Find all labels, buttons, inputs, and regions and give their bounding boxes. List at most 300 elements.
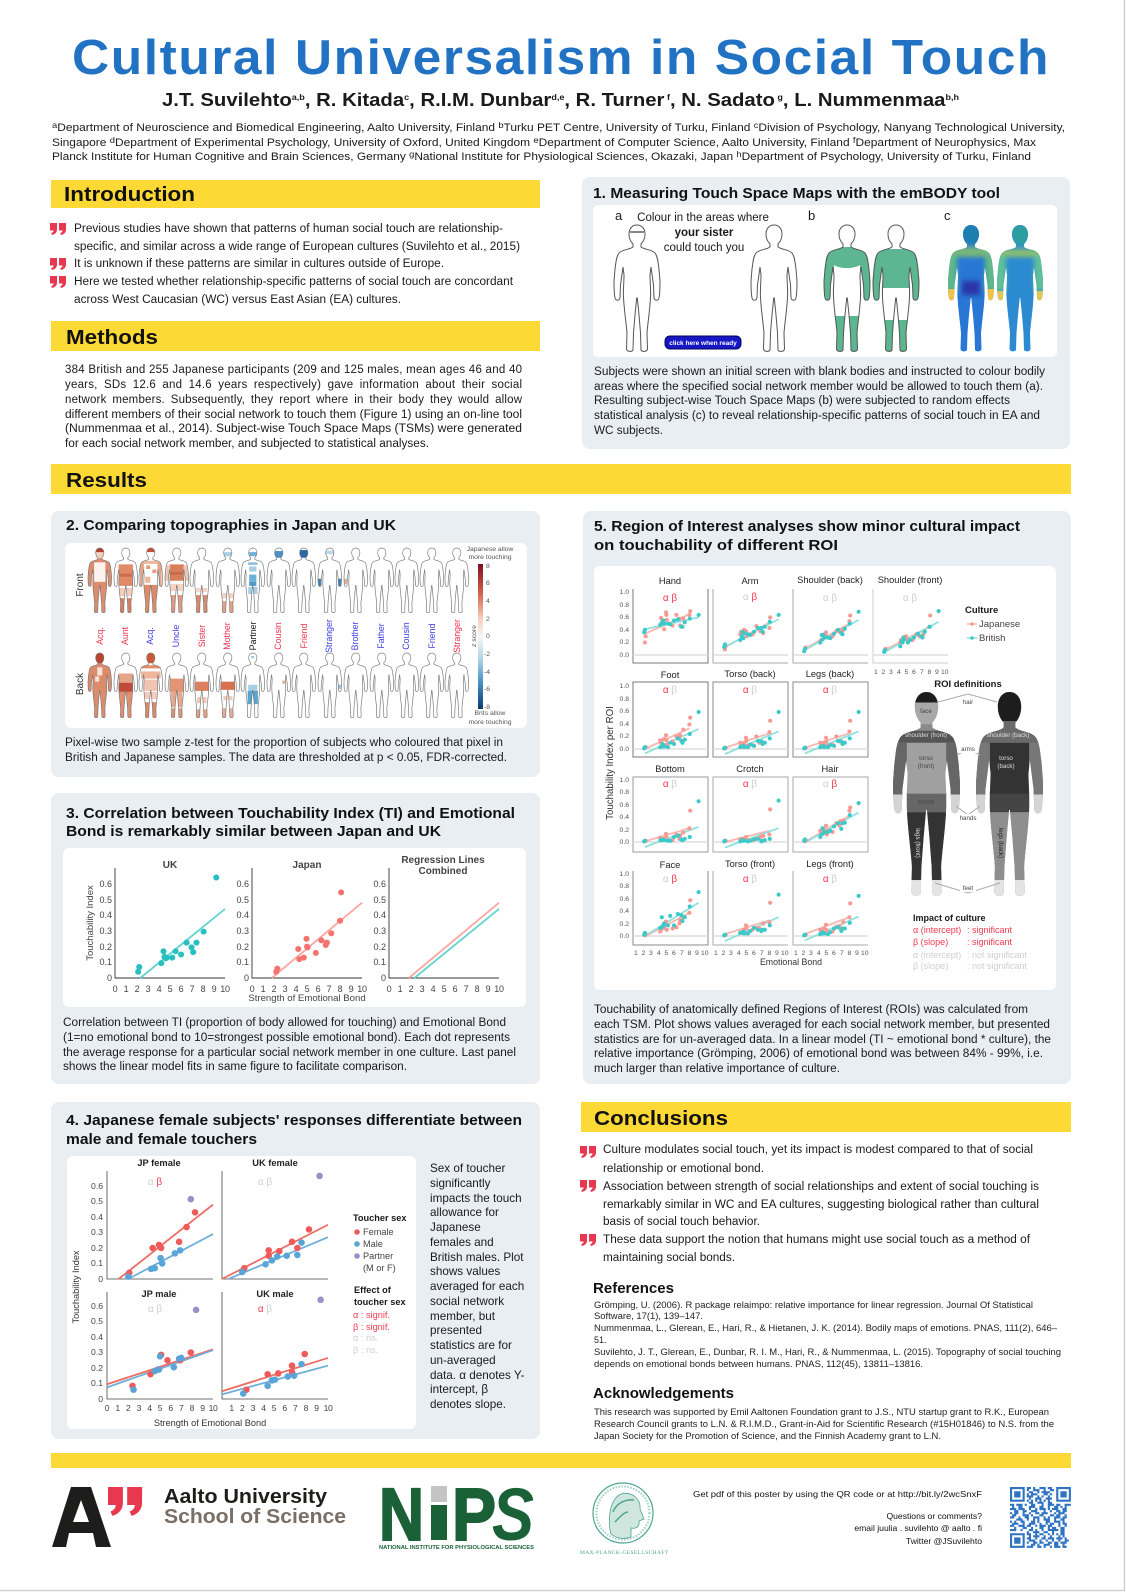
chart: regression lines combined: Combined: [419, 866, 467, 877]
legend: toucher sex: Male: [363, 1239, 383, 1249]
chart: UK: Touchability Index: [85, 885, 96, 961]
heading: Conclusions: Conclusions: [594, 1107, 728, 1130]
chart: UK male: 12345678910: [229, 1403, 333, 1413]
row labels: [75, 573, 86, 695]
y axis tick labels: 0.4: [620, 814, 629, 821]
rotated relationship labels: Father: [376, 623, 386, 649]
plot: Shoulder (front): [873, 575, 948, 663]
acknowledgements: This research was supported by Emil Aaltonen Foundation grant to J.S., NTU startup grant to R.K., European: [594, 1407, 1049, 1417]
side text: intercept, β: [430, 1383, 488, 1396]
body maps: back row: [88, 653, 469, 718]
plot: Hand: α β: [663, 593, 677, 604]
contact text: Get pdf of this poster by using the QR code or at http://bit.ly/2wcSnxF: [693, 1489, 982, 1499]
acknowledgements: [593, 1385, 1054, 1441]
chart: Japan: 0: [244, 973, 249, 983]
y axis tick labels: 0.2: [620, 921, 629, 928]
plot: Shoulder (front): Shoulder (front): [878, 575, 942, 585]
chart: JP female: 0.4: [91, 1212, 103, 1222]
plot: Legs (back): α β: [823, 685, 837, 696]
introduction bullets: across West Caucasian (WC) versus East Asian (EA) cultures.: [74, 294, 401, 306]
chart: JP male: 0.1: [91, 1378, 103, 1388]
caption: Subjects were shown an initial screen with blank bodies and instructed to colour bodily: [594, 366, 1045, 378]
authors: d,e: [551, 93, 565, 102]
side text: significantly: [430, 1177, 491, 1190]
figure a: blank bodies with prompt: could touch you: [664, 242, 744, 254]
chart: UK: 0.5: [99, 895, 112, 905]
panel 4: Japanese female subjects' responses: male and female touchers: [66, 1131, 257, 1148]
conclusions bullets: maintaining social bonds.: [603, 1252, 735, 1264]
rotated relationship labels: Cousin: [401, 622, 411, 650]
affiliations: Department of Neurophysics, Max: [856, 137, 1037, 149]
rotated relationship labels: Partner: [248, 622, 258, 650]
panel 3: correlation between touchability and bond: Bond is remarkably similar between Japan and UK: [66, 823, 441, 840]
plot: Legs (front): Legs (front): [806, 859, 854, 869]
colour bar: more touching: [468, 554, 512, 561]
chart: JP female: 0.6: [91, 1181, 103, 1191]
authors: f: [664, 93, 670, 102]
caption: each TSM. Plot shows values averaged for each social network member, but presented: [594, 1019, 1050, 1031]
logo: Max Planck Society: [580, 1483, 669, 1556]
conclusions bullets: Association between strength of social relationships and extent of social touching is: [603, 1181, 1039, 1193]
plot: Legs (front): α β: [823, 874, 837, 885]
panel 1: measuring touch space maps: [582, 177, 1070, 449]
plot: Torso (front): [713, 859, 788, 945]
side text: presented: [430, 1324, 482, 1337]
legend: impact of culture: β (slope): [913, 961, 948, 971]
affiliations: f: [853, 135, 856, 145]
authors: c: [404, 93, 410, 102]
axis labels: Touchability Index: [71, 1250, 81, 1324]
side text: member, but: [430, 1310, 496, 1323]
side text: data. α denotes Y-: [430, 1369, 525, 1382]
affiliations: g: [409, 149, 415, 159]
side text: denotes slope.: [430, 1398, 506, 1411]
chart: regression lines combined: 0.3: [373, 926, 386, 936]
ROI labels: face: [920, 708, 932, 715]
legend: toucher sex: β : ns.: [353, 1345, 378, 1355]
colour bar: -4: [484, 669, 490, 676]
chart: JP female: 0.3: [91, 1227, 103, 1237]
heading: Results: Results: [66, 469, 147, 492]
authors: , L. Nummenmaa: [783, 90, 947, 110]
ROI labels: hands: [960, 815, 976, 822]
y axis tick labels: 0.8: [620, 789, 629, 796]
legend: toucher sex: [353, 1213, 407, 1355]
ROI labels: torso: [999, 755, 1013, 762]
plot: Bottom: [633, 764, 708, 852]
chart: regression lines combined: 0.6: [373, 879, 386, 889]
colour bar: 2: [486, 616, 490, 623]
plot: Face: [633, 860, 708, 945]
y axis tick labels: 0.4: [620, 908, 629, 915]
panel 5: region of interest analyses: [583, 511, 1071, 1084]
side text: British males. Plot: [430, 1251, 524, 1264]
colour bar: 4: [486, 598, 490, 605]
caption: shows the linear model fits in same figure to facilitate comparison.: [63, 1061, 407, 1073]
chart: JP male: 012345678910: [105, 1403, 218, 1413]
legend: impact of culture: : significant: [967, 925, 1013, 935]
caption: [594, 366, 1045, 437]
chart: UK male: α β: [258, 1304, 272, 1315]
y axis tick labels: 0.6: [620, 802, 629, 809]
ROI labels: legs (front): [914, 828, 921, 858]
y axis tick labels: 0.6: [620, 896, 629, 903]
introduction bullets: [50, 223, 520, 306]
authors: J.T. Suvilehto: [162, 90, 277, 110]
references: Suvilehto, J. T., Glerean, E., Dunbar, R. I. M., Hari, R., & Nummenmaa, L. (2015). Topography of social touching: [594, 1347, 1061, 1357]
references: Software, 17(1), 139–147.: [594, 1311, 703, 1321]
plot: Foot: α β: [663, 685, 677, 696]
side text: Sex of toucher: [430, 1162, 505, 1175]
affiliations: Department of Experimental Psychology, University of Oxford, United Kingdom: [115, 137, 533, 149]
heading: Methods: [51, 321, 540, 351]
logo: Aalto University: Aalto University: [164, 1486, 328, 1508]
axis labels: [605, 706, 822, 967]
plot: Shoulder (front): α β: [903, 593, 917, 604]
chart: regression lines combined: [373, 855, 504, 994]
plot: Hand: Hand: [659, 576, 681, 586]
conclusions bullets: basis of social touch behavior.: [603, 1216, 760, 1228]
rotated relationship labels: Stranger: [324, 619, 334, 653]
colour bar: -6: [484, 686, 490, 693]
conclusions bullets: [580, 1144, 1039, 1264]
x axis tick labels: 12345678910: [874, 669, 949, 676]
figure a: blank bodies with prompt: Colour in the areas where: [637, 212, 769, 224]
affiliations: Department of Neuroscience and Biomedical Engineering, Aalto University, Finland: [57, 122, 498, 134]
y axis tick labels: 0.0: [620, 839, 629, 846]
references: References: [593, 1280, 674, 1297]
references: Nummenmaa, L., Glerean, E., Hari, R., & Hietanen, J. K. (2014). Bodily maps of emotions. PNAS, 111(2), 646–: [594, 1323, 1057, 1333]
chart: JP male: [91, 1289, 218, 1413]
panel 3: correlation between touchability and bond: 3. Correlation between Touchability Index (TI) and Emotional: [66, 805, 515, 822]
ROI labels: (back): [997, 763, 1015, 770]
colour bar: -8: [484, 704, 490, 711]
legend: impact of culture: : not significant: [967, 950, 1028, 960]
chart: UK: 0: [107, 973, 112, 983]
chart: UK: UK: [163, 860, 178, 871]
side text: un-averaged: [430, 1354, 496, 1367]
y axis tick labels: 0.4: [620, 627, 629, 634]
colour bar: Brits allow: [475, 710, 506, 717]
side text: [430, 1162, 525, 1411]
affiliations: Division of Psychology, Nanyang Technological University,: [758, 122, 1065, 134]
plot: Torso (front): Torso (front): [725, 859, 775, 869]
logo: Max Planck Society: MAX-PLANCK-GESELLSCHAFT: [580, 1550, 669, 1556]
logo: NIPS: P: [452, 1473, 496, 1556]
chart: UK: 0.4: [99, 910, 112, 920]
introduction bullets: specific, and similar across a wide range of European cultures (Suvilehto et al., 2015): [74, 241, 520, 253]
figure a: blank bodies with prompt: [614, 208, 797, 351]
chart: UK: [85, 860, 230, 994]
panel 2: comparing topographies: 2. Comparing topographies in Japan and UK: [66, 517, 396, 534]
legend: toucher sex: Female: [363, 1227, 394, 1237]
rotated relationship labels: Cousin: [273, 622, 283, 650]
plot: Shoulder (back): α β: [823, 593, 837, 604]
ROI labels: torso: [919, 755, 933, 762]
plot: Crotch: α β: [743, 779, 757, 790]
chart: JP female: α β: [148, 1177, 162, 1188]
plot: Foot: Foot: [661, 670, 680, 680]
y axis tick labels: 0.8: [620, 602, 629, 609]
chart: UK: 0.1: [99, 957, 112, 967]
legend: culture: British: [979, 633, 1005, 644]
legend: impact of culture: [913, 913, 1028, 971]
side text: allowance for: [430, 1206, 499, 1219]
ROI labels: (front): [918, 763, 934, 770]
chart: regression lines combined: 0: [381, 973, 386, 983]
legend: impact of culture: α (intercept): [913, 950, 961, 960]
rotated relationship labels: Uncle: [171, 625, 181, 647]
heading: Introduction: [51, 180, 540, 208]
panel 2: comparing topographies: [51, 511, 540, 777]
authors: , R. Kitada: [305, 90, 405, 110]
ROI labels: shoulder (back): [987, 732, 1029, 739]
plot: Shoulder (back): Shoulder (back): [797, 575, 863, 585]
figure a: blank bodies with prompt: a: [615, 208, 623, 223]
legend: toucher sex: α : signif.: [353, 1310, 390, 1320]
plot: Arm: α β: [743, 592, 757, 603]
y axis tick labels: 0.2: [620, 827, 629, 834]
chart: UK: 012345678910: [113, 984, 230, 994]
conclusions bullets: These data support the notion that humans might use social touch as a method of: [603, 1234, 1031, 1246]
y axis tick labels: [620, 589, 629, 940]
chart: JP female: 0.2: [91, 1243, 103, 1253]
plot: Bottom: α β: [663, 779, 677, 790]
chart: Japan: 0.5: [236, 895, 249, 905]
heading: Conclusions: [581, 1102, 1071, 1132]
acknowledgements: Japan Society for the Promotion of Science, and the Finnish Academy grant to L.N.: [594, 1431, 941, 1441]
ROI labels: crotch: [918, 799, 935, 806]
chart: Japan: 0.3: [236, 926, 249, 936]
connector lines: [935, 694, 1000, 893]
authors: , R.I.M. Dunbar: [409, 90, 551, 110]
title: Cultural Universalism in Social Touch: [72, 31, 1050, 85]
rotated relationship labels: Brother: [350, 622, 360, 650]
affiliations: c: [754, 120, 759, 130]
ROI labels: legs (back): [997, 828, 1004, 858]
chart: Japan: 0.4: [236, 910, 249, 920]
legend: culture: Culture: [965, 605, 998, 616]
caption: [65, 737, 507, 764]
colour bar: more touching: [468, 719, 512, 726]
axis labels: Emotional Bond: [760, 957, 822, 967]
chart: Japan: 012345678910: [250, 984, 367, 994]
contact text: Twitter @JSuvilehto: [906, 1536, 982, 1546]
row labels: Back: [75, 672, 86, 695]
conclusions bullets: remarkably similar in WC and EA cultures, suggesting biological rather than cultural: [603, 1199, 1039, 1211]
figure c: statistical group map: [943, 208, 1048, 352]
methods text: different members of their social network to touch them (Figure 1) using an on-line tool: [65, 409, 522, 421]
y axis tick labels: 0.8: [620, 883, 629, 890]
logo: NIPS: N: [379, 1473, 424, 1556]
axis labels: [71, 1250, 266, 1428]
caption: (1=no emotional bond to 10=strongest possible emotional bond). Each dot represents: [63, 1032, 510, 1044]
y axis tick labels: 0.2: [620, 733, 629, 740]
plot: Face: α β: [663, 874, 677, 885]
legend: impact of culture: Impact of culture: [913, 913, 986, 923]
chart: UK female: α β: [258, 1177, 272, 1188]
plot: Arm: Arm: [741, 576, 759, 586]
affiliations: Turku PET Centre, University of Turku, Finland: [504, 122, 754, 134]
chart: Japan: [236, 860, 367, 1004]
figure a: blank bodies with prompt: your sister: [675, 227, 734, 239]
body maps: front row: [88, 548, 469, 613]
affiliations: e: [533, 135, 539, 145]
rotated relationship labels: Aunt: [120, 626, 130, 645]
footer bar: [51, 1453, 1071, 1468]
ROI labels: arms: [961, 746, 975, 753]
caption: statistics are for un-averaged data. In a linear model (TI ~ emotional bond * culture), the: [594, 1034, 1051, 1046]
plot: Bottom: Bottom: [655, 764, 685, 774]
affiliations: Singapore: [52, 137, 101, 149]
affiliations: h: [736, 149, 742, 159]
plot: Crotch: [713, 764, 788, 852]
caption: Resulting subject-wise Touch Space Maps (b) were subjected to random effects: [594, 395, 1010, 407]
caption: British and Japanese samples. The data are thresholded at p < 0.05, FDR-corrected.: [65, 752, 507, 764]
side text: Japanese: [430, 1221, 481, 1234]
plot: Torso (front): α β: [743, 874, 757, 885]
rotated relationship labels: Sister: [197, 625, 207, 647]
chart: regression lines combined: 0.4: [373, 910, 386, 920]
side text: impacts the touch: [430, 1192, 522, 1205]
logo: NIPS: [379, 1473, 534, 1556]
plot: Face: Face: [660, 860, 680, 870]
affiliations: Planck Institute for Human Cognitive and Brain Sciences, Germany: [52, 151, 373, 163]
plot: Crotch: Crotch: [736, 764, 764, 774]
chart: UK: 0.6: [99, 879, 112, 889]
chart: JP female: 0.1: [91, 1258, 103, 1268]
y axis tick labels: 1.0: [620, 589, 629, 596]
y axis tick labels: 0.0: [620, 746, 629, 753]
panel 3: correlation between touchability and bond: [51, 793, 540, 1084]
panel 5: region of interest analyses: on touchability of different ROI: [594, 537, 838, 554]
plot: Hair: α β: [823, 779, 837, 790]
chart: JP female: 0: [98, 1274, 103, 1284]
authors: , R. Turner: [564, 90, 664, 110]
legend: impact of culture: β (slope): [913, 937, 948, 947]
rotated relationship labels: Friend: [427, 623, 437, 648]
figure c: statistical group map: c: [944, 208, 951, 223]
legend: toucher sex: (M or F): [363, 1263, 396, 1273]
plot: Arm: [713, 576, 788, 663]
y axis tick labels: 1.0: [620, 683, 629, 690]
legend: culture: [965, 605, 1020, 644]
x axis tick labels: 12345678910: [634, 950, 709, 957]
chart: UK: 0.2: [99, 942, 112, 952]
plot: Torso (back): [713, 669, 788, 757]
plot: Torso (back): α β: [743, 685, 757, 696]
legend: toucher sex: Effect of: [354, 1285, 392, 1295]
legend: toucher sex: α : ns.: [353, 1333, 378, 1343]
affiliations: d: [110, 135, 115, 145]
rotated relationship labels: Stranger: [452, 619, 462, 653]
plot: Torso (back): Torso (back): [724, 669, 776, 679]
chart: JP male: 0.6: [91, 1301, 103, 1311]
logo: NIPS: S: [492, 1473, 534, 1556]
x axis tick labels: [634, 669, 949, 957]
chart: Japan: Japan: [293, 860, 321, 871]
caption: the average response for a particular social network member in one culture. Last panel: [63, 1047, 516, 1059]
side text: shows values: [430, 1265, 500, 1278]
affiliations: b: [498, 120, 504, 130]
caption: statistical analysis (c) to reveal relationship-specific patterns of social touch in EA and: [594, 410, 1040, 422]
rotated relationship labels: Mother: [222, 622, 232, 650]
plot: Legs (back): Legs (back): [806, 669, 854, 679]
chart: Japan: 0.1: [236, 957, 249, 967]
x axis tick labels: 12345678910: [714, 950, 789, 957]
conclusions bullets: relationship or emotional bond.: [603, 1163, 764, 1175]
chart: JP male: 0: [98, 1394, 103, 1404]
chart: JP male: 0.3: [91, 1347, 103, 1357]
y axis tick labels: 0.8: [620, 696, 629, 703]
ROI definitions diagram: ROI definitions: [934, 679, 1002, 690]
authors: g: [775, 93, 783, 102]
body: front ROI: [893, 692, 960, 898]
colour bar: Japanese allow: [467, 546, 514, 553]
y axis tick labels: 1.0: [620, 777, 629, 784]
caption: WC subjects.: [594, 425, 663, 437]
caption: Correlation between TI (proportion of body allowed for touching) and Emotional Bond: [63, 1017, 506, 1029]
contact text: email juulia . suvilehto @ aalto . fi: [854, 1523, 982, 1533]
panel 5: region of interest analyses: 5. Region of Interest analyses show minor cultural impact: [594, 518, 1020, 535]
figure b: coloured subject map: b: [808, 208, 815, 223]
chart: UK male: UK male: [256, 1289, 294, 1299]
methods text: for each social network member, and subjected to statistical analyses.: [65, 438, 429, 450]
chart: Japan: 0.2: [236, 942, 249, 952]
plot: Foot: [633, 670, 708, 757]
authors: b,h: [945, 93, 959, 102]
logo: Aalto University: School of Science: [164, 1506, 346, 1528]
chart: JP female: 0.5: [91, 1196, 103, 1206]
affiliations: Department of Psychology, University of Turku, Finland: [742, 151, 1031, 163]
chart: Japan: Strength of Emotional Bond: [248, 993, 366, 1004]
side text: females and: [430, 1236, 494, 1249]
legend: impact of culture: α (intercept): [913, 925, 961, 935]
y axis tick labels: 0.0: [620, 933, 629, 940]
plot: Legs (front): [793, 859, 868, 945]
ROI labels: bottom: [999, 799, 1017, 806]
plot: Hair: Hair: [821, 764, 839, 774]
chart: JP male: α β: [148, 1304, 162, 1315]
references: 51.: [594, 1335, 607, 1345]
affiliations: [52, 120, 1065, 163]
x axis tick labels: 12345678910: [794, 950, 869, 957]
chart: UK female: [222, 1158, 328, 1279]
legend: toucher sex: toucher sex: [354, 1297, 406, 1307]
colour bar: [467, 546, 514, 726]
caption: areas where the specified social network member would be allowed to touch them (a).: [594, 381, 1043, 393]
y axis tick labels: 0.0: [620, 652, 629, 659]
introduction bullets: Previous studies have shown that patterns of human social touch are relationship-: [74, 223, 503, 235]
axis labels: Touchability Index per ROI: [605, 706, 616, 820]
references: depends on emotional bonds between humans. PNAS, 112(45), 13811–13816.: [594, 1359, 923, 1369]
ROI labels: feet: [963, 885, 973, 892]
chart: UK: 0.3: [99, 926, 112, 936]
colour bar: -2: [484, 651, 490, 658]
heading: Introduction: Introduction: [64, 183, 195, 206]
references: [593, 1280, 1061, 1369]
acknowledgements: Acknowledgements: [593, 1385, 734, 1402]
affiliations: National Institute for Physiological Sciences, Okazaki, Japan: [414, 151, 736, 163]
side text: averaged for each: [430, 1280, 524, 1293]
rotated relationship labels: Friend: [299, 623, 309, 648]
colour bar: 0: [486, 633, 490, 640]
plot: Legs (back): [793, 669, 868, 757]
legend: toucher sex: Toucher sex: [353, 1213, 407, 1223]
chart: Japan: 0.6: [236, 879, 249, 889]
ROI definitions diagram: [893, 679, 1043, 898]
contact text: Questions or comments?: [886, 1511, 982, 1521]
